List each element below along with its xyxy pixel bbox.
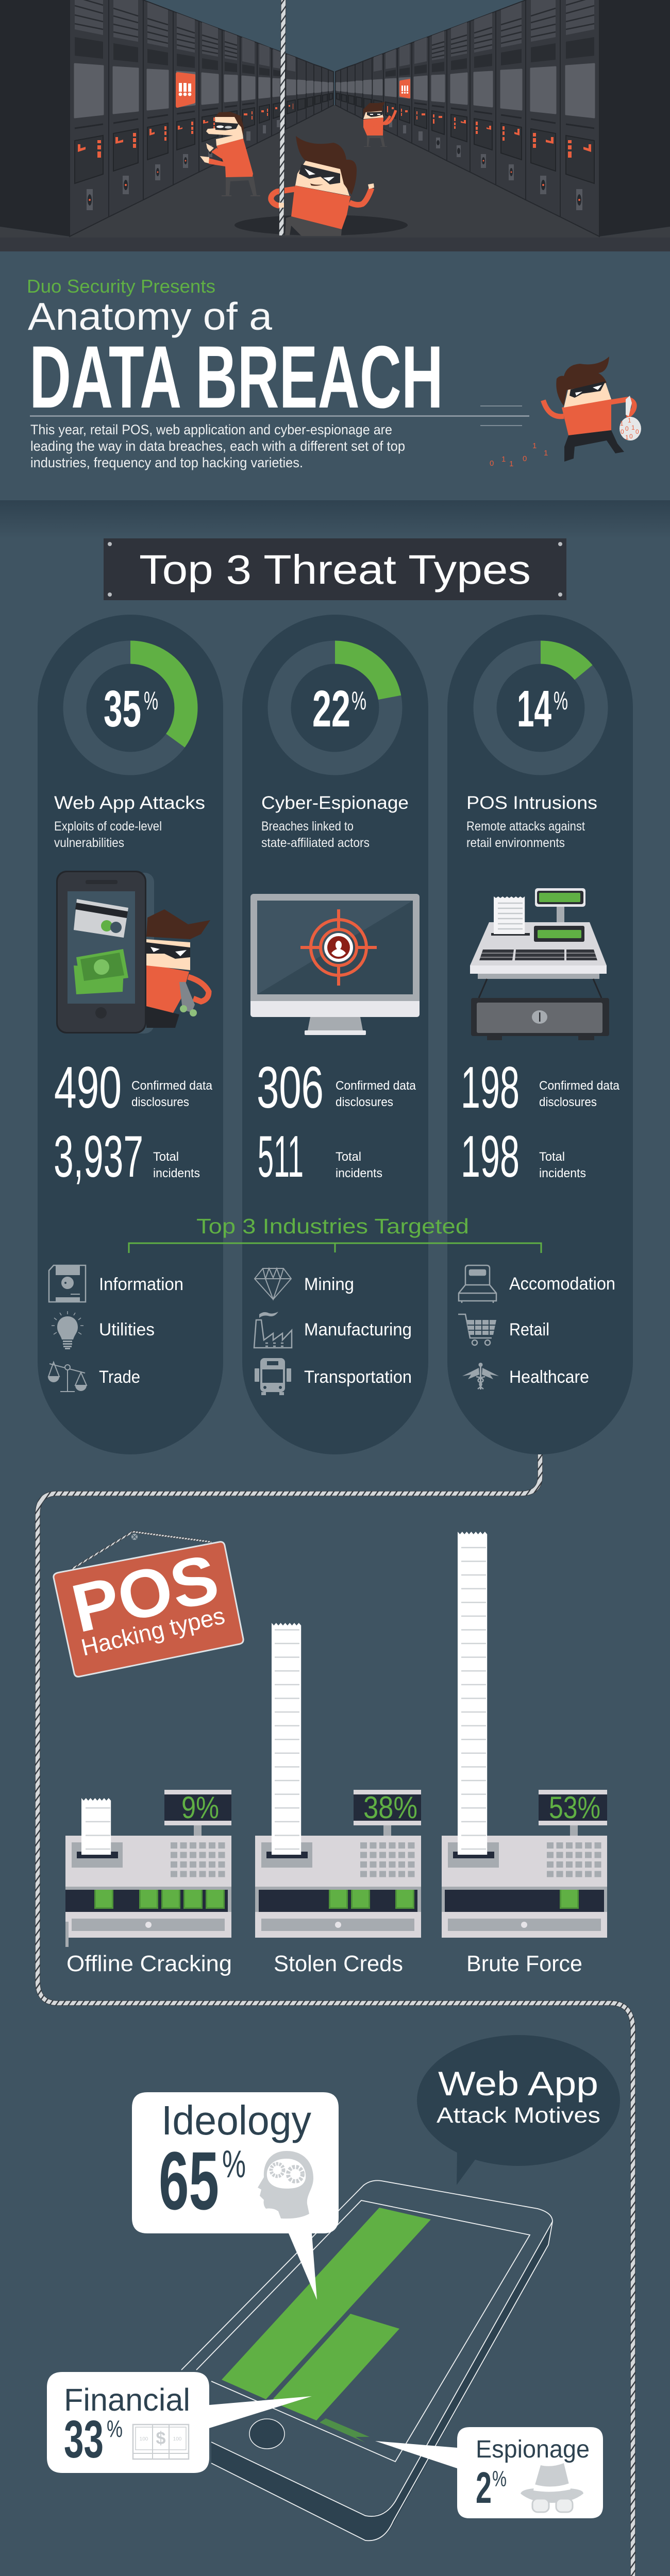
running thief with binary bag: 0 bbox=[629, 433, 633, 440]
icon: monitor with target bbox=[250, 894, 420, 1035]
register body bbox=[442, 1836, 607, 1938]
display: 9%: 9% bbox=[181, 1790, 219, 1825]
running thief with binary bag: 1 bbox=[631, 424, 635, 431]
register body bbox=[65, 1836, 231, 1947]
sign subtitle: Hacking types bbox=[79, 1602, 227, 1661]
header panel bbox=[0, 251, 670, 500]
bracket bbox=[129, 1243, 541, 1253]
POS chart: stolen creds bbox=[255, 1623, 421, 1976]
icon: floppy disk bbox=[49, 1265, 86, 1302]
receipt bar bbox=[272, 1623, 301, 1855]
stat: 306: 306 bbox=[257, 1055, 324, 1121]
label: Stolen Creds bbox=[274, 1951, 403, 1976]
running thief with binary bag: 1 bbox=[544, 449, 548, 457]
stat: 511: incidents bbox=[336, 1166, 382, 1180]
icon: factory bbox=[254, 1312, 292, 1348]
left server racks bbox=[70, 0, 333, 236]
stat: 198 total: 198 bbox=[461, 1124, 520, 1190]
alert sign right bbox=[399, 79, 410, 98]
stat: 198 confirmed: 198 bbox=[461, 1055, 520, 1121]
receipt bar bbox=[458, 1532, 487, 1855]
hanging wire bbox=[72, 1532, 211, 1569]
rule bbox=[30, 415, 529, 417]
intro text: leading the way in data breaches, each with a different set of top bbox=[30, 438, 405, 454]
home button bbox=[249, 2419, 284, 2449]
receipt bar bbox=[81, 1798, 111, 1855]
POS chart: brute force bbox=[442, 1532, 607, 1976]
stat: 198 confirmed: disclosures bbox=[539, 1095, 597, 1109]
banner: top 3 threat types bbox=[104, 538, 566, 600]
POS chart: offline cracking bbox=[65, 1790, 232, 1976]
donut 35%: % bbox=[144, 686, 158, 715]
icon: scales bbox=[48, 1362, 87, 1392]
stat: 490 bbox=[54, 1055, 213, 1121]
screw bbox=[131, 1534, 138, 1540]
donut 22% bbox=[279, 652, 391, 764]
right server racks bbox=[336, 0, 599, 236]
label: Trade bbox=[99, 1367, 140, 1387]
stat: 198 total: incidents bbox=[539, 1166, 586, 1180]
phone outline bbox=[181, 2180, 552, 2540]
intro text: industries, frequency and top hacking varieties. bbox=[30, 455, 303, 470]
web app phone chart bbox=[181, 2180, 552, 2540]
donut 14%: 14 bbox=[517, 680, 551, 738]
callout: ideology: 65 bbox=[159, 2134, 219, 2227]
running thief with binary bag: 1 bbox=[509, 460, 513, 468]
heading: top 3 industries targeted: Top 3 Industries Targeted bbox=[196, 1214, 469, 1238]
callout: espionage: Espionage bbox=[476, 2436, 590, 2463]
icon: money: $ bbox=[156, 2429, 166, 2448]
icon: money bbox=[133, 2425, 189, 2459]
stat: 306: disclosures bbox=[336, 1095, 393, 1109]
running thief with binary bag: 0 bbox=[625, 425, 629, 432]
donut 35%: 35 bbox=[104, 680, 141, 738]
icon: phone with thief bbox=[56, 871, 210, 1033]
intro text: This year, retail POS, web application and cyber-espionage are bbox=[30, 422, 392, 437]
description: vulnerabilities bbox=[54, 836, 124, 850]
running thief with binary bag: 1 bbox=[501, 455, 506, 464]
right end wall bbox=[599, 0, 670, 236]
title line 2: DATA BREACH bbox=[29, 328, 443, 427]
label: Utilities bbox=[99, 1320, 155, 1340]
description: state-affiliated actors bbox=[261, 836, 370, 850]
stat: 490: disclosures bbox=[131, 1095, 189, 1109]
display: 38% bbox=[354, 1790, 421, 1836]
thief at far rack bbox=[363, 102, 396, 147]
running thief with binary bag: 0 bbox=[635, 428, 639, 435]
stat: 3,937: incidents bbox=[153, 1166, 200, 1180]
hole in the floor bbox=[234, 215, 408, 235]
stat: 490: Confirmed data bbox=[131, 1079, 213, 1093]
heading: POS Intrusions bbox=[466, 793, 597, 813]
icon: money: 100 bbox=[173, 2436, 182, 2442]
bubble: web app attack motives: Web App bbox=[438, 2064, 598, 2103]
display: 53%: 53% bbox=[549, 1790, 600, 1825]
description: retail environments bbox=[466, 836, 565, 850]
register body bbox=[255, 1836, 421, 1938]
stat: 511: 511 bbox=[258, 1124, 304, 1190]
callout: financial: % bbox=[107, 2415, 123, 2442]
callout: espionage: % bbox=[492, 2467, 507, 2492]
callout: financial bbox=[47, 2372, 312, 2473]
callout: ideology: % bbox=[222, 2142, 246, 2185]
panel: web app attacks bbox=[38, 615, 223, 1454]
icon: head with gears bbox=[258, 2151, 313, 2218]
alert sign left bbox=[176, 72, 195, 108]
label: Retail bbox=[509, 1320, 549, 1340]
stat: 3,937: 3,937 bbox=[54, 1124, 143, 1190]
icon: diamond bbox=[255, 1268, 291, 1299]
intro text bbox=[30, 422, 405, 470]
label: Information bbox=[99, 1275, 183, 1294]
description bbox=[261, 819, 370, 850]
kicker: Duo Security Presents bbox=[27, 276, 215, 297]
label: Brute Force bbox=[466, 1951, 582, 1976]
display: 9% bbox=[164, 1790, 231, 1836]
callout: espionage bbox=[375, 2427, 603, 2518]
thief hand on rope bbox=[279, 202, 284, 208]
label: Accomodation bbox=[509, 1274, 615, 1294]
callout: financial: Financial bbox=[64, 2382, 190, 2417]
shadow below header bbox=[0, 500, 670, 539]
icon: spy hat and glasses bbox=[521, 2463, 583, 2512]
stat: 198 confirmed: Confirmed data bbox=[539, 1079, 620, 1093]
heading: Cyber-Espionage bbox=[261, 793, 409, 813]
description bbox=[54, 819, 162, 850]
connecting ropes bbox=[38, 1454, 633, 2576]
donut 14%: % bbox=[554, 686, 568, 715]
callout: financial: 33 bbox=[64, 2410, 104, 2469]
description: Remote attacks against bbox=[466, 819, 585, 834]
label: Mining bbox=[304, 1275, 354, 1294]
description: Breaches linked to bbox=[261, 819, 354, 834]
icon: bed bbox=[459, 1265, 496, 1303]
phone side bbox=[211, 2222, 552, 2540]
icon: bus bbox=[255, 1358, 291, 1395]
stat: 198 confirmed bbox=[461, 1055, 620, 1121]
running thief with binary bag: 1 bbox=[625, 434, 629, 441]
heading: Web App Attacks bbox=[54, 793, 205, 813]
stat: 3,937: Total bbox=[153, 1150, 179, 1164]
stat: 306: Confirmed data bbox=[336, 1079, 416, 1093]
icon: caduceus bbox=[462, 1363, 499, 1389]
bar: ideology bbox=[222, 2208, 431, 2399]
description: Exploits of code-level bbox=[54, 819, 162, 834]
bubble: web app attack motives: Attack Motives bbox=[437, 2103, 600, 2128]
running thief with binary bag bbox=[480, 357, 641, 468]
running thief with binary bag: 0 bbox=[523, 454, 527, 463]
label: Transportation bbox=[304, 1367, 412, 1387]
floor bbox=[0, 105, 670, 251]
label: Manufacturing bbox=[304, 1320, 412, 1340]
callout: espionage: 2 bbox=[476, 2464, 492, 2513]
running thief with binary bag: 1 bbox=[628, 417, 631, 424]
panel: cyber-espionage bbox=[242, 615, 428, 1454]
label: Healthcare bbox=[509, 1367, 589, 1387]
icon: money: 100 bbox=[140, 2436, 148, 2442]
stat: 511: Total bbox=[336, 1150, 361, 1164]
running thief with binary bag: 0 bbox=[621, 428, 624, 435]
description bbox=[466, 819, 585, 850]
callout: ideology: Ideology bbox=[161, 2097, 311, 2143]
callout: ideology bbox=[132, 2092, 339, 2300]
stat: 306 bbox=[257, 1055, 416, 1121]
bar: espionage bbox=[320, 2418, 370, 2443]
POS hacking types sign bbox=[54, 1532, 243, 1676]
sign title: POS bbox=[65, 1540, 225, 1647]
donut 35% bbox=[75, 652, 186, 764]
donut 22%: % bbox=[351, 686, 366, 715]
hero: server room illustration bbox=[0, 0, 670, 251]
icon: shopping cart bbox=[458, 1314, 496, 1345]
left end wall bbox=[0, 0, 70, 236]
industries list: column 3 bbox=[458, 1265, 615, 1389]
running thief with binary bag: 1 bbox=[532, 442, 537, 450]
rope from ceiling bbox=[281, 0, 283, 235]
bar: financial bbox=[273, 2314, 399, 2420]
stat: 198 total: Total bbox=[539, 1150, 565, 1164]
label: Offline Cracking bbox=[66, 1951, 232, 1976]
icon: light bulb bbox=[52, 1311, 83, 1349]
title line 1: Anatomy of a bbox=[28, 295, 272, 338]
running thief with binary bag: 1 bbox=[620, 420, 624, 427]
display: 38%: 38% bbox=[363, 1790, 417, 1825]
panel: POS intrusions bbox=[447, 615, 633, 1454]
thief pointing at rack bbox=[200, 112, 260, 196]
running thief with binary bag: 0 bbox=[490, 459, 494, 468]
stat: 490: 490 bbox=[54, 1055, 122, 1121]
banner title: Top 3 Threat Types bbox=[139, 547, 531, 592]
industries list: column 2 bbox=[254, 1268, 412, 1395]
icon: cash register bbox=[470, 888, 609, 1040]
donut 22%: 22 bbox=[312, 680, 350, 738]
donut 14% bbox=[485, 652, 596, 764]
industries list: column 1 bbox=[48, 1265, 183, 1392]
thief climbing out of hole bbox=[271, 136, 374, 236]
display: 53% bbox=[539, 1790, 607, 1836]
bubble: web app attack motives bbox=[417, 2035, 620, 2185]
